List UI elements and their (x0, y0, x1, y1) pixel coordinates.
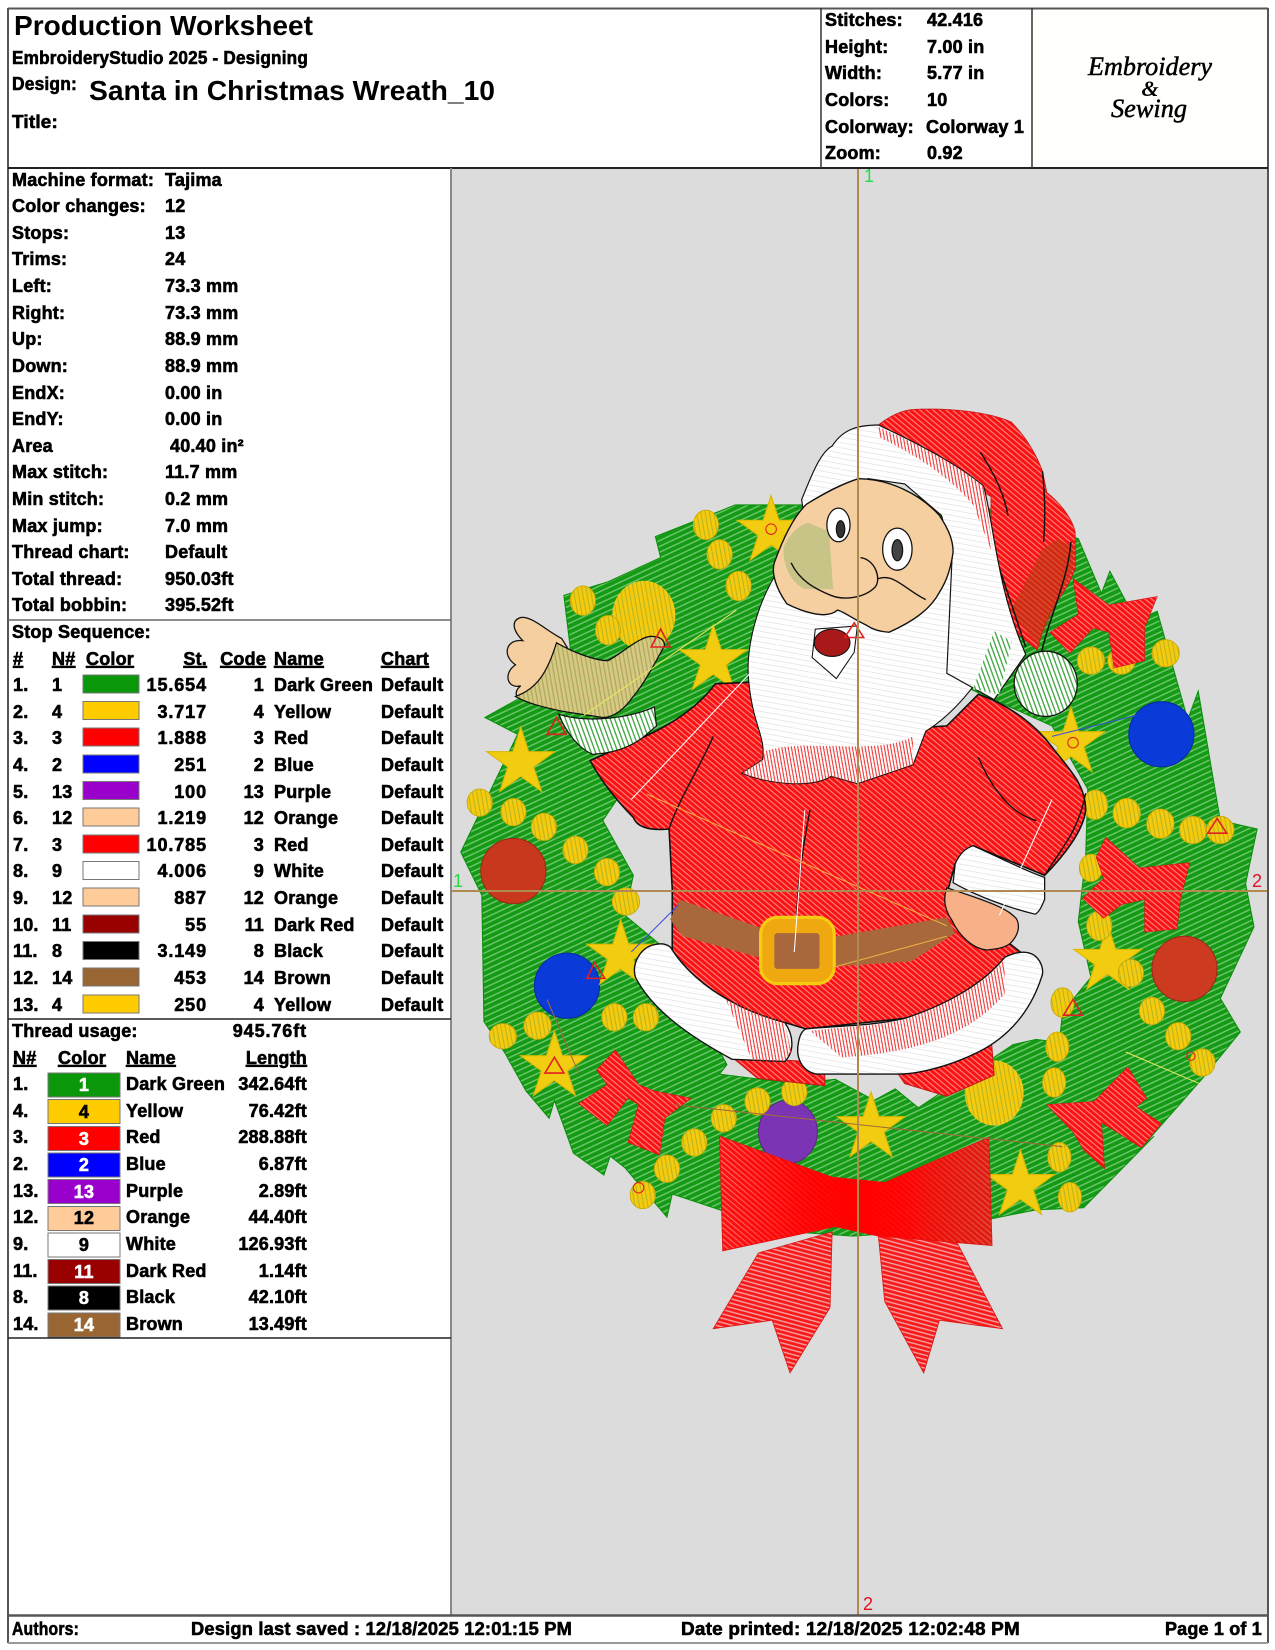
stop sequence rows: 55 (185, 915, 207, 935)
thread usage swatch numbers: 12 (74, 1208, 94, 1228)
thread usage rows: Black (126, 1287, 176, 1307)
red boots (732, 1057, 825, 1086)
thread usage rows (13, 1074, 307, 1334)
stop sequence rows: 6. (13, 808, 28, 828)
panel: design statistics (825, 10, 1024, 163)
eyes (827, 508, 912, 570)
thread usage rows: Dark Green (126, 1074, 225, 1094)
stop sequence rows: 4.006 (157, 861, 207, 881)
left cuff (559, 707, 656, 754)
thread usage rows: 14. (13, 1314, 39, 1334)
panel: machine settings: Trims: (12, 249, 67, 269)
Santa figure (507, 409, 1086, 1096)
panel: header title block (12, 10, 495, 132)
thread usage rows: Blue (126, 1154, 166, 1174)
thread usage swatch numbers: 1 (79, 1075, 89, 1095)
thread usage swatch numbers: 8 (79, 1288, 89, 1308)
thread usage rows: 11. (13, 1261, 38, 1281)
thread usage heading and total: 945.76ft (233, 1021, 307, 1041)
embroidery illustration: Santa in Christmas wreath (461, 409, 1257, 1373)
hat tail shading over wreath (1011, 539, 1073, 646)
thread usage rows: 6.87ft (259, 1154, 307, 1174)
white leg fur trims (634, 944, 1043, 1074)
stop sequence rows: 1.219 (157, 808, 207, 828)
stop sequence rows: 3 (52, 728, 62, 748)
panel: stitch preview canvas (452, 166, 1267, 1615)
panel: design statistics: Height: (825, 37, 888, 57)
stop sequence rows: 8 (52, 941, 62, 961)
stop sequence rows: 8. (13, 861, 28, 881)
stop sequence rows: 887 (174, 888, 207, 908)
stop sequence rows (13, 675, 443, 1015)
thread usage swatch numbers: 13 (74, 1182, 94, 1202)
white fur hat trim (802, 425, 1026, 700)
thread usage heading and total (12, 1021, 307, 1041)
panel: design statistics: Stitches: (825, 10, 903, 30)
stop sequence rows: 3 (254, 835, 264, 855)
stop sequence rows: 10.785 (147, 835, 207, 855)
panel: machine settings: 24 (165, 249, 185, 269)
thread usage swatch numbers (74, 1075, 94, 1335)
stop sequence rows: 9 (52, 861, 62, 881)
panel: machine settings: EndY: (12, 409, 64, 429)
stop sequence rows: 9. (13, 888, 28, 908)
stop sequence rows: 11 (245, 915, 264, 935)
stop sequence rows: 14 (52, 968, 72, 988)
panel: machine settings: Stops: (12, 223, 69, 243)
panel: machine settings: 12 (165, 196, 185, 216)
stop sequence rows: White (274, 861, 324, 881)
stop sequence rows: 4 (254, 995, 264, 1015)
guide labels: 2 (1252, 871, 1262, 891)
thread usage rows: 44.40ft (249, 1207, 307, 1227)
title: Production Worksheet (14, 10, 313, 41)
panel: design statistics: Zoom: (825, 143, 881, 163)
panel: machine settings: Total thread: (12, 569, 122, 589)
stop sequence rows: 251 (174, 755, 207, 775)
panel: machine settings: Total bobbin: (12, 595, 127, 615)
stop sequence rows: 4 (52, 995, 62, 1015)
stop sequence rows: Blue (274, 755, 314, 775)
stop sequence rows: 7. (13, 835, 28, 855)
panel: machine settings: Area (12, 436, 54, 456)
stop sequence rows: 1.888 (157, 728, 207, 748)
beard (742, 547, 994, 784)
panel: thread usage table (12, 1021, 307, 1337)
thread usage swatch numbers: 3 (79, 1129, 89, 1149)
stop sequence rows: Orange (274, 888, 338, 908)
thread usage rows: 42.10ft (249, 1287, 307, 1307)
panel: machine settings: 0.00 in (165, 383, 222, 403)
stop sequence rows: 3 (52, 835, 62, 855)
stop sequence rows: 3.149 (157, 941, 207, 961)
panel: design statistics: 0.92 (927, 143, 963, 163)
left hand (507, 617, 664, 717)
belt (670, 899, 955, 967)
hat (873, 409, 1075, 650)
stop sequence column headers: Name (274, 649, 324, 669)
stop sequence column headers: St. (183, 649, 207, 669)
panel: machine settings: Max jump: (12, 516, 103, 536)
stop sequence rows: 13 (52, 782, 72, 802)
stop sequence rows: 3 (254, 728, 264, 748)
garland beads (467, 510, 1234, 1212)
logo: Embroidery & Sewing (1033, 9, 1268, 167)
large bow and tails (713, 1136, 1003, 1373)
panel: machine settings: 7.0 mm (165, 516, 228, 536)
body and sleeves (590, 682, 1086, 1029)
stop sequence rows: Default (381, 968, 443, 988)
stop sequence rows: 2. (13, 702, 28, 722)
thread usage rows: 1.14ft (259, 1261, 307, 1281)
panel: machine settings: Thread chart: (12, 542, 130, 562)
stop sequence rows: Dark Green (274, 675, 373, 695)
thread usage rows: 126.93ft (238, 1234, 307, 1254)
panel: design statistics: Colorway: (825, 117, 914, 137)
stop sequence rows: 12 (244, 808, 264, 828)
thread usage rows: Orange (126, 1207, 190, 1227)
stop sequence rows: 9 (254, 861, 264, 881)
ornament balls (481, 581, 1217, 1164)
logo: Embroidery & Sewing: Sewing (1111, 94, 1187, 123)
guide labels: 2 (863, 1594, 873, 1614)
stop sequence rows: 11 (52, 915, 71, 935)
panel: machine settings: 11.7 mm (165, 462, 237, 482)
stop sequence column headers: Code (220, 649, 266, 669)
stop sequence rows: 10. (13, 915, 39, 935)
stop sequence rows: Default (381, 782, 443, 802)
stop sequence rows: Yellow (274, 702, 332, 722)
stop sequence column headers: N# (52, 649, 75, 669)
stop sequence rows: 15.654 (147, 675, 207, 695)
belt buckle (761, 917, 834, 984)
panel: machine settings: Tajima (165, 170, 223, 190)
thread usage rows: 13.49ft (249, 1314, 307, 1334)
design label: Design: (12, 74, 77, 94)
panel: footer: Authors: (12, 1619, 79, 1639)
panel: machine settings: 0.00 in (165, 409, 222, 429)
panel: machine settings: 88.9 mm (165, 329, 238, 349)
stop sequence rows: 3. (13, 728, 28, 748)
title label: Title: (12, 112, 58, 132)
thread usage rows: 342.64ft (238, 1074, 307, 1094)
panel: design statistics: Width: (825, 63, 882, 83)
stop sequence heading: Stop Sequence: (12, 622, 151, 642)
right hand (945, 888, 1018, 950)
thread usage column headers: N# (13, 1048, 36, 1068)
thread usage heading and total: Thread usage: (12, 1021, 138, 1041)
stop sequence rows: Black (274, 941, 324, 961)
panel: machine settings: 395.52ft (165, 595, 234, 615)
thread usage column headers: Name (126, 1048, 176, 1068)
panel: machine settings: Left: (12, 276, 52, 296)
stop sequence rows: 5. (13, 782, 28, 802)
guide labels: 1 (864, 166, 874, 186)
stop sequence column headers (13, 649, 429, 669)
thread usage swatch numbers: 14 (74, 1315, 94, 1335)
stop sequence rows: 12 (244, 888, 264, 908)
thread usage rows: 8. (13, 1287, 28, 1307)
panel: footer (12, 1619, 1262, 1639)
stop sequence rows: 4 (52, 702, 62, 722)
guide labels (453, 166, 1262, 1614)
thread usage rows: Brown (126, 1314, 183, 1334)
stop sequence rows: Default (381, 861, 443, 881)
panel: machine settings: Min stitch: (12, 489, 104, 509)
panel: design statistics: 10 (927, 90, 947, 110)
panel: machine settings (12, 170, 244, 615)
stop sequence rows: 1 (254, 675, 264, 695)
thread usage column headers: Length (246, 1048, 307, 1068)
stop sequence rows: Brown (274, 968, 331, 988)
stop sequence rows: Default (381, 728, 443, 748)
stop sequence rows: Default (381, 675, 443, 695)
thread usage rows: 288.88ft (238, 1127, 307, 1147)
crosshair guide lines (452, 169, 1267, 1615)
thread usage rows: Dark Red (126, 1261, 207, 1281)
panel: stop sequence table (12, 622, 443, 1015)
mouth (812, 626, 857, 679)
stop sequence rows: 13 (244, 782, 264, 802)
thread usage swatch numbers: 2 (79, 1155, 89, 1175)
panel: machine settings: Up: (12, 329, 43, 349)
thread usage rows: 9. (13, 1234, 28, 1254)
pom pom (1014, 651, 1077, 716)
stop sequence rows: 12 (52, 888, 72, 908)
stop sequence rows: 12. (13, 968, 39, 988)
stop sequence rows: 250 (174, 995, 207, 1015)
stop sequence rows: 1. (13, 675, 28, 695)
panel: footer: Design last saved : 12/18/2025 12:01:15 PM (191, 1619, 572, 1639)
small bows (579, 579, 1190, 1169)
stop sequence rows: Purple (274, 782, 331, 802)
stop sequence rows: Default (381, 808, 443, 828)
stop sequence rows: Default (381, 915, 443, 935)
thread usage rows: Purple (126, 1181, 183, 1201)
thread usage rows: 2. (13, 1154, 28, 1174)
stop sequence color swatches (83, 675, 139, 1013)
software line: EmbroideryStudio 2025 - Designing (12, 48, 308, 68)
stop sequence rows: 4. (13, 755, 28, 775)
panel: machine settings: 73.3 mm (165, 276, 238, 296)
panel: machine settings: 0.2 mm (165, 489, 228, 509)
stop sequence rows: Default (381, 941, 443, 961)
wreath (461, 494, 1257, 1236)
stop sequence rows: Default (381, 835, 443, 855)
thread usage rows: Red (126, 1127, 161, 1147)
thread usage rows: White (126, 1234, 176, 1254)
nose and moustache lines (791, 558, 926, 600)
panel: machine settings: Right: (12, 303, 65, 323)
right cuff (953, 846, 1045, 914)
nose and cheek shading (783, 523, 833, 589)
panel: machine settings: Max stitch: (12, 462, 108, 482)
panel: machine settings: Default (165, 542, 227, 562)
stars (487, 495, 1142, 1215)
guide labels: 1 (453, 871, 463, 891)
stop sequence rows: Red (274, 835, 309, 855)
thread usage swatch numbers: 9 (79, 1235, 89, 1255)
stop sequence rows: Yellow (274, 995, 332, 1015)
design name: Santa in Christmas Wreath_10 (89, 75, 495, 106)
thread usage rows: 76.42ft (249, 1101, 307, 1121)
panel: machine settings: 13 (165, 223, 185, 243)
stop sequence rows: Red (274, 728, 309, 748)
stop sequence rows: 2 (254, 755, 264, 775)
stop sequence rows: Default (381, 995, 443, 1015)
stop sequence rows: 100 (174, 782, 207, 802)
thread usage color swatches (48, 1073, 120, 1337)
stop sequence rows: Default (381, 755, 443, 775)
thread usage column headers (13, 1048, 307, 1068)
panel: design statistics: Colorway 1 (926, 117, 1024, 137)
panel: machine settings: Down: (12, 356, 68, 376)
stop sequence rows: Default (381, 702, 443, 722)
thread usage rows: 4. (13, 1101, 28, 1121)
stop sequence rows: 14 (244, 968, 264, 988)
stop sequence rows: 12 (52, 808, 72, 828)
stop sequence rows: 1 (52, 675, 62, 695)
panel: machine settings: 40.40 in² (170, 436, 244, 456)
panel: machine settings: 88.9 mm (165, 356, 238, 376)
thread usage column headers: Color (58, 1048, 106, 1068)
stop sequence rows: Default (381, 888, 443, 908)
thread usage rows: 2.89ft (259, 1181, 307, 1201)
thread usage rows: 3. (13, 1127, 28, 1147)
stop sequence rows: 13. (13, 995, 39, 1015)
panel: design statistics: 7.00 in (927, 37, 984, 57)
panel: footer: Page 1 of 1 (1165, 1619, 1262, 1639)
panel: footer: Date printed: 12/18/2025 12:02:48 PM (681, 1619, 1020, 1639)
stop sequence rows: Orange (274, 808, 338, 828)
face (773, 479, 953, 632)
thread usage swatch numbers: 4 (79, 1102, 89, 1122)
panel: machine settings: 73.3 mm (165, 303, 238, 323)
stop sequence rows: 4 (254, 702, 264, 722)
panel: machine settings: 950.03ft (165, 569, 234, 589)
panel: design statistics: Colors: (825, 90, 889, 110)
stop sequence rows: 3.717 (157, 702, 207, 722)
panel: machine settings: Color changes: (12, 196, 146, 216)
stop sequence rows: Dark Red (274, 915, 355, 935)
thread usage rows: 13. (13, 1181, 39, 1201)
stop sequence rows: 2 (52, 755, 62, 775)
stop sequence column headers: # (13, 649, 23, 669)
panel: machine settings: EndX: (12, 383, 65, 403)
thread usage swatch numbers: 11 (74, 1262, 94, 1282)
stop sequence rows: 11. (13, 941, 38, 961)
thread usage rows: 1. (13, 1074, 28, 1094)
stop sequence column headers: Chart (381, 649, 429, 669)
thread usage rows: 12. (13, 1207, 39, 1227)
panel: design statistics: 42.416 (927, 10, 983, 30)
stitch connector lines and stop markers (545, 524, 1227, 1193)
logo: Embroidery & Sewing: Embroidery (1087, 52, 1212, 81)
panel: machine settings: Machine format: (12, 170, 154, 190)
stop sequence column headers: Color (86, 649, 134, 669)
logo: Embroidery & Sewing: & (1141, 76, 1159, 101)
thread usage rows: Yellow (126, 1101, 184, 1121)
stop sequence rows: 8 (254, 941, 264, 961)
stop sequence rows: 453 (174, 968, 207, 988)
beard shading fringes (742, 736, 913, 784)
panel: design statistics: 5.77 in (927, 63, 984, 83)
